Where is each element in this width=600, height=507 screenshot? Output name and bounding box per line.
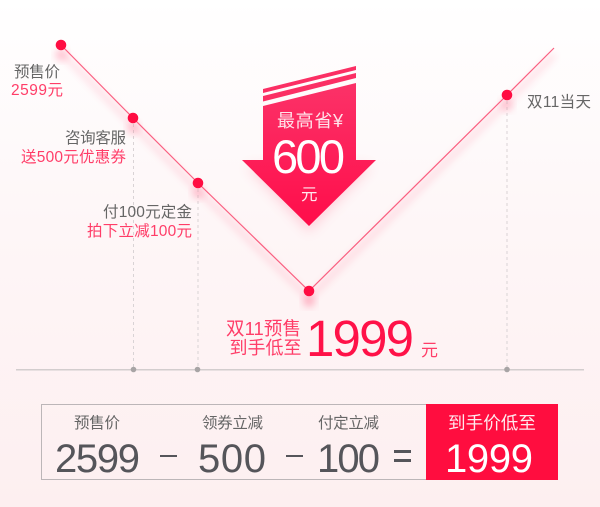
panel: final price: 到手价低至 [448, 413, 536, 433]
item: deposit discount: 付定立减 [318, 414, 379, 432]
callout: double 11 final price: 元 [421, 341, 438, 360]
item: deposit discount: 100 [317, 437, 380, 481]
label: pay 100 deposit: 拍下立减100元 [87, 222, 192, 240]
arrow number: 600: 600 [272, 130, 345, 183]
item: coupon discount: 领券立减 [202, 414, 263, 432]
axis line [16, 367, 584, 372]
minus sign [160, 455, 177, 457]
item: coupon discount [198, 414, 266, 481]
label: consult customer service [21, 129, 126, 166]
panel: final price [426, 404, 558, 481]
chart: price trend line [55, 40, 554, 369]
arrow stripes [263, 66, 356, 102]
item: presale price [55, 414, 140, 481]
callout: double 11 final price: 双11预售 [226, 318, 301, 339]
panel: price equation [42, 404, 426, 481]
item: coupon discount: 500 [198, 437, 266, 481]
minus sign [286, 455, 303, 457]
arrow unit: 元 [301, 186, 318, 204]
label: consult customer service: 咨询客服 [65, 129, 126, 147]
item: presale price: 预售价 [74, 414, 120, 432]
item: deposit discount [317, 414, 380, 481]
panel: final price: 1999 [445, 437, 533, 481]
callout: maximum saving arrow [242, 66, 376, 232]
arrow text: highest saving: 最高省¥ [277, 111, 344, 131]
callout: double 11 final price [226, 310, 438, 367]
label: pay 100 deposit [87, 203, 192, 240]
arrow body [242, 83, 376, 226]
label: presale price: 预售价 [14, 63, 60, 81]
label: consult customer service: 送500元优惠券 [21, 148, 126, 166]
label: presale price [11, 63, 63, 99]
label: pay 100 deposit: 付100元定金 [103, 203, 192, 221]
equals sign [394, 450, 411, 462]
callout: double 11 final price: 到手低至 [230, 338, 302, 358]
label: double 11 day: 双11当天 [527, 93, 591, 111]
big price 1999: 1999 [306, 310, 414, 367]
item: presale price: 2599 [55, 437, 140, 481]
label: presale price: 2599元 [11, 82, 63, 99]
